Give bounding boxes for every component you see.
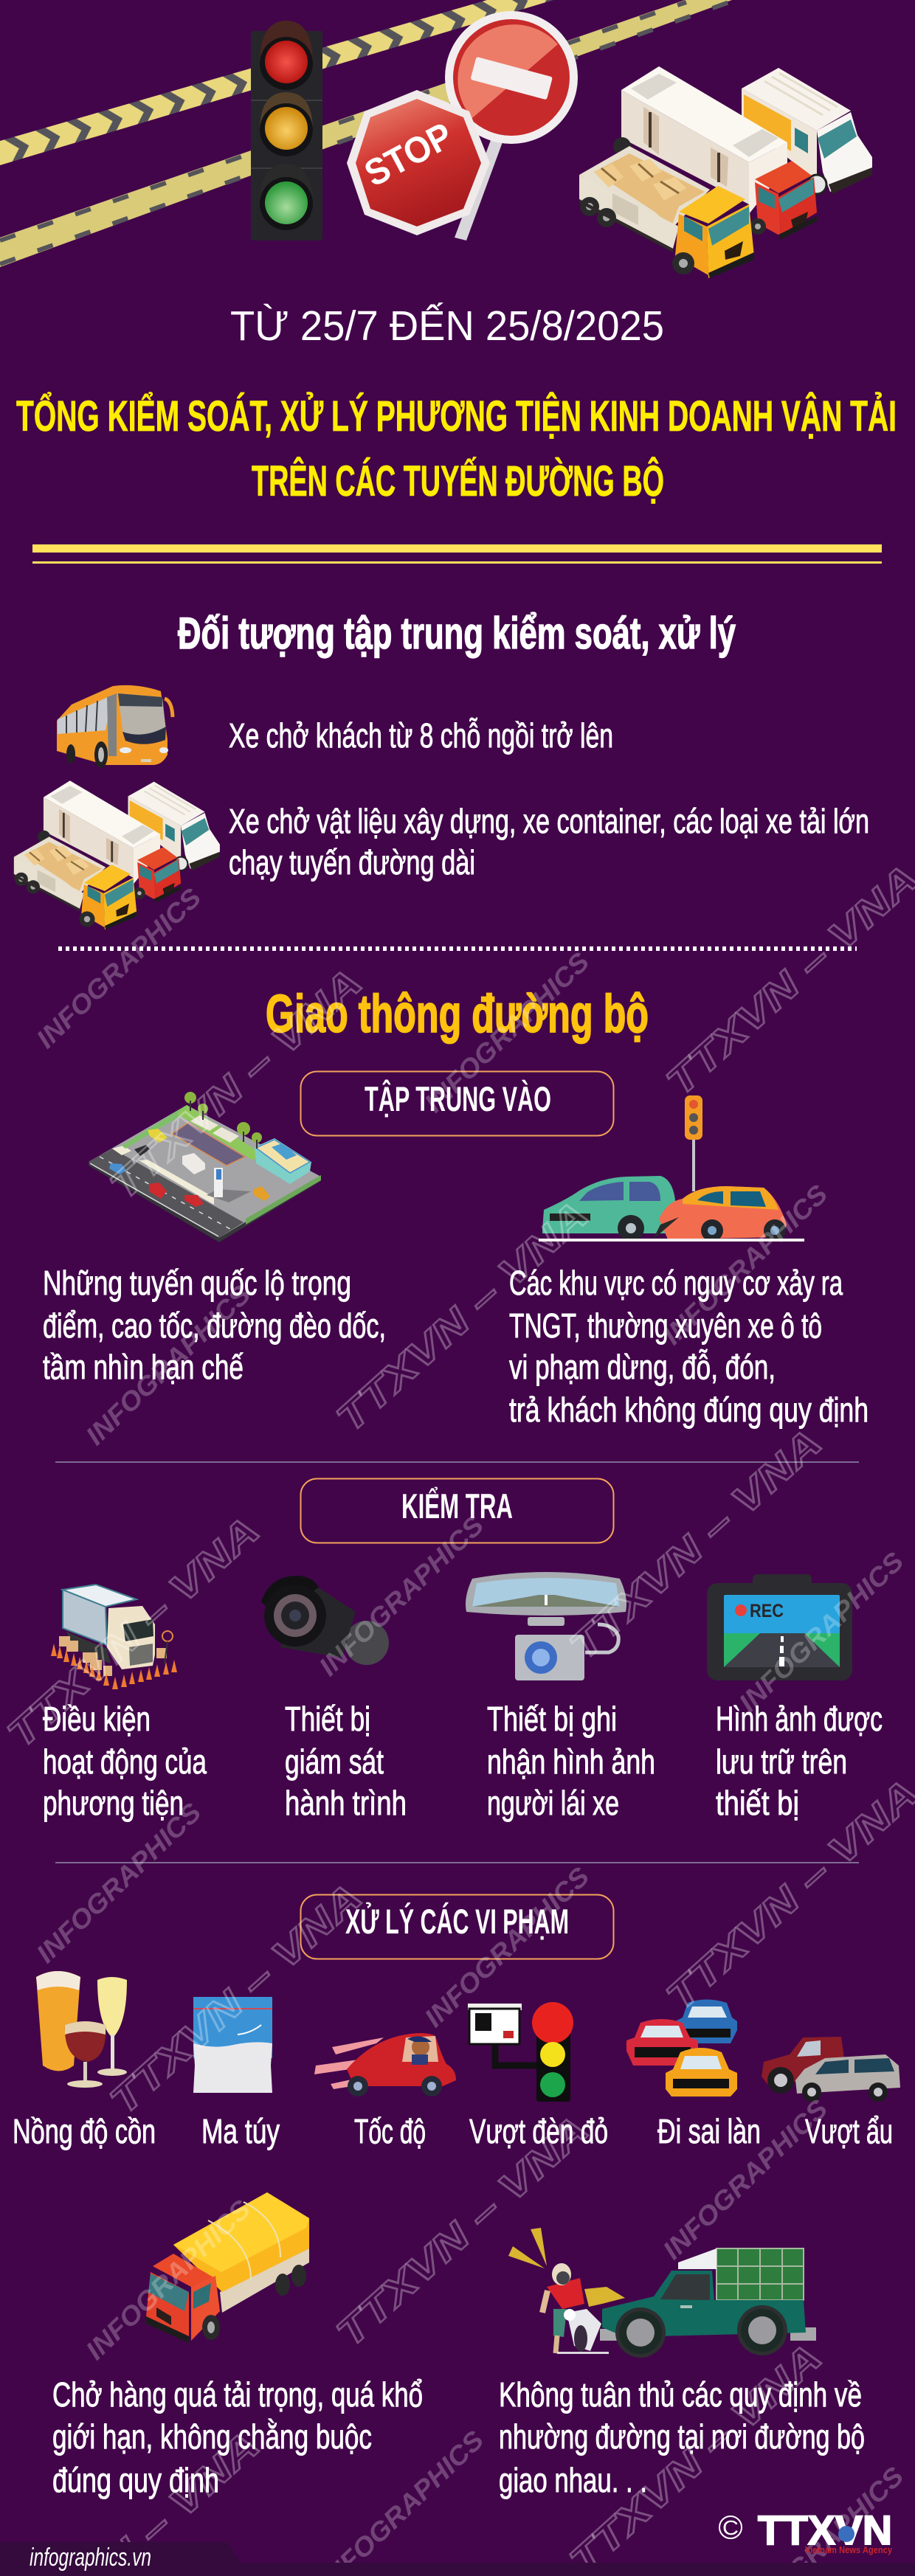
icon: mirror camera xyxy=(466,1572,626,1680)
text: overload violation xyxy=(52,2375,423,2499)
logo: TTXVN copyright: Vietnam News Agency xyxy=(805,2544,893,2555)
caution tape upper xyxy=(0,0,553,165)
text: stored images xyxy=(716,1700,883,1822)
label box: inspection: KIỂM TRA xyxy=(401,1486,513,1526)
watermarks: TTXVN – VNA xyxy=(658,856,915,1104)
text: vehicle conditions: phương tiện xyxy=(43,1784,184,1822)
text: overload violation: Chở hàng quá tải trọng, quá khổ xyxy=(52,2375,423,2414)
icon: three cars xyxy=(626,1999,737,2097)
icon: surveillance camera xyxy=(261,1576,389,1665)
icon: motorbike and pickup crash xyxy=(508,2228,816,2358)
watermarks xyxy=(0,856,915,2576)
text: focus left: tầm nhìn hạn chế xyxy=(43,1348,244,1386)
red cab xyxy=(755,161,812,193)
text: right of way violation xyxy=(499,2375,865,2499)
violation labels: Ma túy xyxy=(201,2112,280,2150)
text: journey monitor: Thiết bị xyxy=(285,1700,370,1738)
text: vehicle conditions: Điều kiện xyxy=(43,1700,151,1738)
watermarks: INFOGRAPHICS xyxy=(418,1861,595,2033)
watermarks: INFOGRAPHICS xyxy=(657,2094,833,2265)
text: journey monitor: hành trình xyxy=(285,1784,407,1822)
watermarks: INFOGRAPHICS xyxy=(313,1510,489,1682)
text: right of way violation: giao nhau. . . xyxy=(499,2461,647,2499)
text: journey monitor: giám sát xyxy=(285,1742,384,1781)
text: passenger vehicles: Xe chở khách từ 8 chỗ ngồi trở lên xyxy=(229,716,613,755)
text: driver recorder: người lái xe xyxy=(487,1784,619,1822)
text: cargo vehicles: chạy tuyến đường dài xyxy=(229,843,475,882)
footer band xyxy=(0,2542,915,2576)
icon: drug bag xyxy=(193,1997,272,2093)
watermarks: INFOGRAPHICS xyxy=(30,1797,207,1969)
text: overload violation: đúng quy định xyxy=(52,2461,219,2499)
text: driver recorder: nhận hình ảnh xyxy=(487,1742,655,1781)
icon: stop sign xyxy=(347,90,490,235)
label box: violations xyxy=(301,1894,614,1959)
text: driver recorder: Thiết bị ghi xyxy=(487,1700,617,1738)
icon: speeding car xyxy=(314,2033,456,2097)
violation labels: Tốc độ xyxy=(354,2112,426,2150)
text: focus right: vi phạm dừng, đỗ, đón, xyxy=(509,1348,776,1386)
watermarks: TTXVN – VNA xyxy=(0,1509,268,1756)
watermarks: INFOGRAPHICS xyxy=(733,1546,909,1718)
text: stored images: lưu trữ trên xyxy=(716,1742,847,1781)
flatbed xyxy=(579,146,710,226)
watermarks: INFOGRAPHICS xyxy=(80,1279,256,1451)
watermarks: TTXVN – VNA xyxy=(102,1875,370,2123)
white van xyxy=(742,89,817,181)
text: focus left: điểm, cao tốc, đường đèo dốc, xyxy=(43,1306,386,1345)
icon: drinks xyxy=(36,1971,127,2088)
long container xyxy=(621,90,749,204)
watermarks: INFOGRAPHICS xyxy=(418,946,595,1118)
icon: truck with cones xyxy=(51,1585,177,1689)
violation labels: Đi sai làn xyxy=(657,2112,761,2150)
text: focus left: Những tuyến quốc lộ trọng xyxy=(43,1264,351,1302)
text: stored images: thiết bị xyxy=(716,1784,799,1822)
label box: focus xyxy=(301,1071,614,1136)
text: cargo vehicles xyxy=(229,802,869,882)
icon: no entry sign xyxy=(445,11,578,240)
violation labels: Nồng độ cồn xyxy=(13,2112,156,2150)
title: TRÊN CÁC TUYẾN ĐƯỜNG BỘ xyxy=(252,457,664,505)
violation labels xyxy=(13,2112,893,2150)
label box: focus: TẬP TRUNG VÀO xyxy=(365,1079,551,1118)
text: vehicle conditions: hoạt động của xyxy=(43,1742,207,1781)
watermarks: TTXVN – VNA xyxy=(102,960,370,1208)
logo: TTXVN copyright: C xyxy=(722,2516,739,2539)
icon: dash camera screen: REC xyxy=(750,1601,784,1621)
icon: highway area xyxy=(89,1092,321,1242)
label box: violations: XỬ LÝ CÁC VI PHẠM xyxy=(345,1902,569,1941)
violation labels: Vượt đèn đỏ xyxy=(469,2112,608,2150)
icon: traffic light xyxy=(251,21,322,240)
icon: bus xyxy=(57,685,173,768)
watermarks: TTXVN – VNA xyxy=(328,2108,597,2355)
watermarks: TTXVN – VNA xyxy=(658,1771,915,2019)
icon: group of trucks small xyxy=(14,780,220,929)
footer website: infographics.vn xyxy=(30,2544,151,2572)
watermarks: TTXVN – VNA xyxy=(328,1193,597,1441)
heading: road traffic: Giao thông đường bộ xyxy=(266,985,649,1044)
watermarks: INFOGRAPHICS xyxy=(80,2194,256,2366)
caution tape lower xyxy=(0,0,732,267)
text: focus right xyxy=(509,1264,869,1429)
icon: group of trucks xyxy=(579,66,872,278)
icon: dash camera screen xyxy=(707,1574,852,1680)
logo: TTXVN copyright: TTXVN xyxy=(758,2507,892,2553)
icon: red light camera xyxy=(468,2002,573,2102)
label box: inspection xyxy=(301,1478,614,1543)
icon: car crash at traffic light xyxy=(539,1095,804,1242)
yellow cab xyxy=(679,186,745,224)
watermarks: INFOGRAPHICS xyxy=(30,882,207,1054)
text: focus left xyxy=(43,1264,386,1386)
text: driver recorder xyxy=(487,1700,655,1822)
title xyxy=(16,392,897,505)
icon: two SUVs overtaking xyxy=(762,2037,900,2102)
icon: overloaded truck xyxy=(146,2192,309,2343)
icon: stop sign: STOP xyxy=(358,114,459,195)
text: vehicle conditions xyxy=(43,1700,207,1822)
watermarks: INFOGRAPHICS xyxy=(657,1179,833,1351)
text: journey monitor xyxy=(285,1700,407,1822)
date range: TỪ 25/7 ĐẾN 25/8/2025 xyxy=(230,302,664,350)
watermarks: TTXVN – VNA xyxy=(562,1421,830,1669)
text: overload violation: giới hạn, không chằng buộc xyxy=(52,2417,372,2456)
